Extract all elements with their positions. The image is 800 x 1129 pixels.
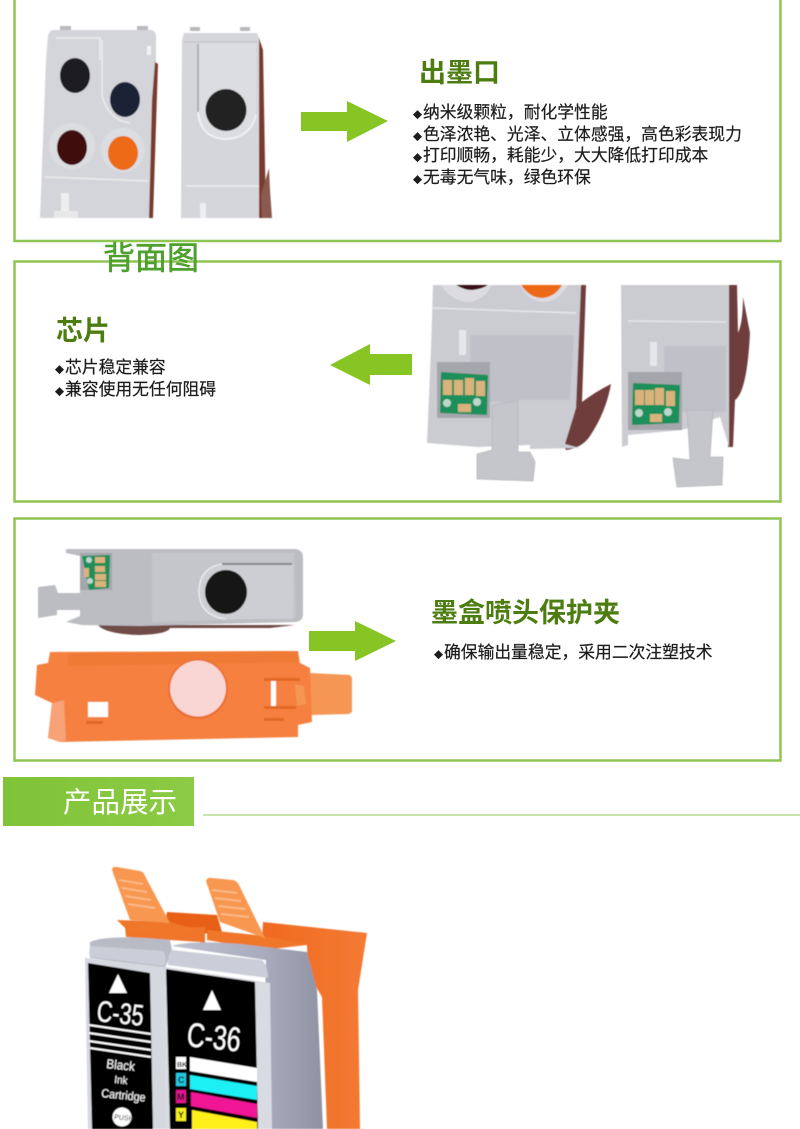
bullet text: ◆ <box>434 650 443 660</box>
panel: chip <box>14 262 780 502</box>
chip side <box>632 383 680 425</box>
label C-35 <box>88 963 153 1129</box>
label C-35: PUSH <box>114 1114 134 1123</box>
orange protective clip <box>35 651 352 742</box>
ink port: dark blue <box>110 82 140 117</box>
cartridge top view <box>38 549 303 635</box>
label C-35: Cartridge <box>101 1088 146 1105</box>
ink port: orange <box>108 136 138 170</box>
bullet list: 无毒无气味，绿色环保 <box>423 168 591 187</box>
bullet list: ◆ <box>55 365 64 375</box>
label C-35: Ink <box>114 1075 129 1088</box>
chip top <box>82 555 110 590</box>
cartridge with chip, front <box>427 285 611 481</box>
arrow: right <box>301 101 388 142</box>
label C-36: Y <box>178 1110 184 1120</box>
bullet list: ◆ <box>413 153 422 163</box>
heading: chip: 芯片 <box>56 316 110 346</box>
section header: product display <box>3 777 800 826</box>
product photo: C-35 and C-36 cartridges <box>85 867 367 1129</box>
chip <box>440 372 488 415</box>
bullet list: ◆ <box>413 132 422 142</box>
clear nozzle seal <box>168 659 228 719</box>
heading: ink outlet: 出墨口 <box>419 58 500 88</box>
ink port: black <box>60 58 90 93</box>
bullet list: 色泽浓艳、光泽、立体感强，高色彩表现力 <box>423 125 742 144</box>
bullet list: ◆ <box>413 110 422 120</box>
bullet list: 打印顺畅，耗能少，大大降低打印成本 <box>423 146 709 165</box>
panel: ink outlet <box>14 0 780 241</box>
label C-36: C-36 <box>185 1016 243 1060</box>
tab: C-36 <box>206 878 307 950</box>
nozzle recess <box>199 564 293 619</box>
bullet list: ◆ <box>55 387 64 397</box>
bullet list <box>413 103 742 187</box>
cartridge C-35 body <box>85 937 172 1129</box>
orange clip body <box>262 922 367 1129</box>
label C-36: C <box>178 1075 185 1085</box>
cartridge side: single outlet <box>181 27 272 218</box>
cartridge back: four ink outlets <box>40 26 158 218</box>
label C-36: BK <box>177 1062 187 1069</box>
arrow: right <box>309 621 396 661</box>
ink port: black large <box>206 89 246 131</box>
section header: product display: 产品展示 <box>63 787 177 819</box>
bullet list: 兼容使用无任何阻碍 <box>65 379 216 399</box>
heading: protective clip: 墨盒喷头保护夹 <box>431 597 620 628</box>
panel: nozzle protective clip <box>14 518 780 760</box>
label C-35: Black <box>106 1057 136 1074</box>
label C-35: C-35 <box>95 994 145 1033</box>
cartridge C-36 body <box>165 942 323 1129</box>
bullet list <box>55 358 216 399</box>
label C-36 <box>166 969 258 1129</box>
label C-36: M <box>177 1092 184 1102</box>
bullet text: 确保输出量稳定，采用二次注塑技术 <box>444 643 713 662</box>
ink port <box>205 570 247 614</box>
tab: C-35 <box>112 867 190 938</box>
arrow: left <box>330 344 412 385</box>
bullet list: 纳米级颗粒，耐化学性能 <box>423 103 608 122</box>
caption: back view: 背面图 <box>103 240 199 276</box>
bullet list: ◆ <box>413 175 422 185</box>
cartridge with chip, side <box>621 285 750 487</box>
lever side <box>673 410 723 487</box>
ink port: dark red <box>57 130 87 165</box>
bullet list: 芯片稳定兼容 <box>65 358 166 377</box>
lever <box>477 401 535 481</box>
